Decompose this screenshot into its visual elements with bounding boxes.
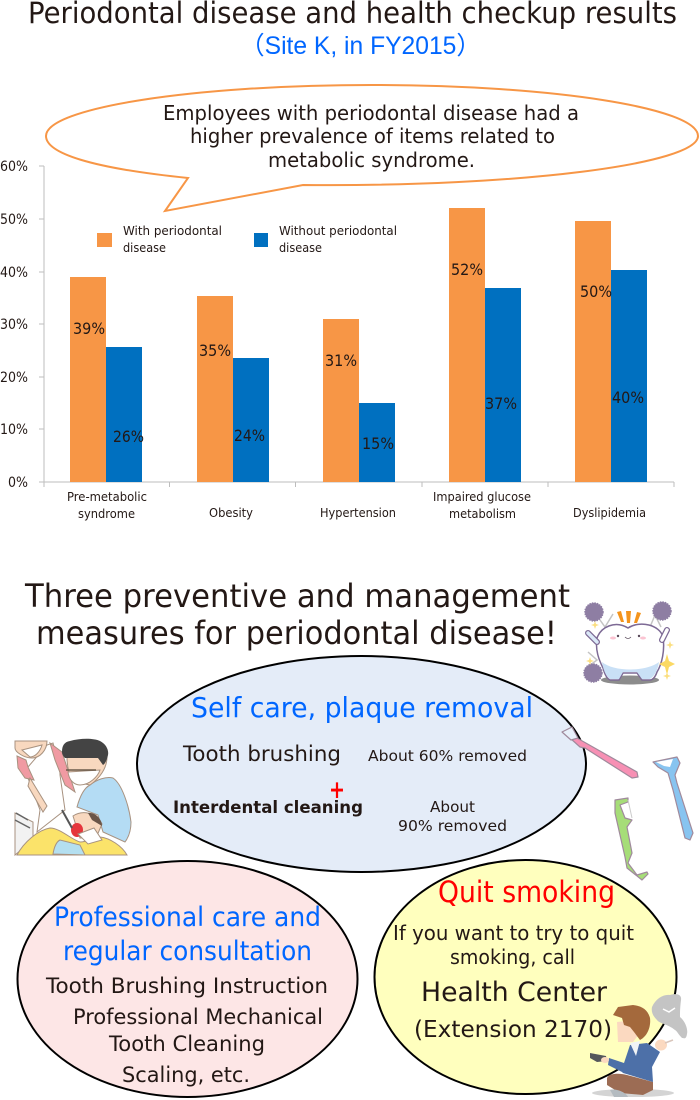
panel: self care: [137, 656, 586, 872]
icon: green floss pick: [615, 798, 648, 880]
panel: quit smoking: Health Center: [421, 977, 608, 1008]
category labels: Hypertension: [320, 505, 396, 520]
value labels: 40%: [612, 388, 644, 407]
heading: three measures: Three preventive and management: [24, 577, 570, 615]
heading: three measures: [24, 577, 570, 652]
legend: Without periodontal: [279, 223, 397, 238]
callout: [46, 85, 698, 211]
panel: self care: About 60% removed: [368, 747, 527, 765]
y axis: 30%: [0, 317, 28, 333]
legend: With periodontal: [123, 223, 222, 238]
y axis: [0, 159, 674, 491]
value labels: 31%: [325, 351, 357, 370]
panel: self care: Self care, plaque removal: [191, 691, 533, 724]
y axis: 40%: [0, 265, 28, 281]
panel: self care: About: [430, 798, 475, 816]
panel: quit smoking: [374, 860, 676, 1094]
category labels: Impaired glucose: [433, 489, 531, 504]
subtitle: （Site K, in FY2015）: [240, 32, 481, 60]
icon: dentist treating child: [15, 739, 131, 855]
panel: self care: Interdental cleaning: [173, 798, 363, 818]
y axis: 50%: [0, 212, 28, 228]
value labels: 35%: [199, 341, 231, 360]
y axis: 10%: [0, 422, 28, 438]
panel: self care: 90% removed: [398, 817, 507, 835]
panel: self care: +: [329, 775, 345, 804]
icon: smiling tooth with germs: [584, 602, 675, 684]
callout: higher prevalence of items related to: [190, 124, 555, 148]
panel: self care: Tooth brushing: [182, 742, 341, 767]
panel: professional care: [18, 861, 358, 1097]
value labels: 15%: [362, 434, 394, 453]
y axis: 20%: [0, 370, 28, 386]
panel: professional care: Professional Mechanical: [73, 1005, 323, 1029]
legend: [97, 223, 397, 255]
category labels: Obesity: [209, 505, 254, 520]
value labels: 52%: [451, 260, 483, 279]
value labels: 39%: [73, 319, 105, 338]
category labels: metabolism: [449, 506, 516, 521]
panel: quit smoking: If you want to try to quit: [393, 921, 634, 945]
bars: with periodontal disease: [70, 208, 611, 482]
bar chart: [0, 159, 674, 521]
icon: pink toothbrush: [562, 727, 638, 778]
callout: metabolic syndrome.: [268, 148, 475, 172]
category labels: syndrome: [78, 506, 135, 521]
panel: quit smoking: Quit smoking: [438, 875, 615, 909]
y axis: 60%: [0, 159, 28, 175]
value labels: 26%: [113, 427, 144, 446]
panel: professional care: Professional care and: [54, 902, 321, 933]
bars: without periodontal disease: [106, 270, 647, 482]
icon: man smoking with phone: [590, 994, 687, 1097]
value labels: 24%: [234, 426, 265, 445]
panel: professional care: Scaling, etc.: [122, 1063, 250, 1087]
y axis: 0%: [8, 475, 28, 491]
heading: three measures: measures for periodontal disease!: [36, 614, 557, 652]
value labels: [73, 260, 644, 453]
panel: quit smoking: (Extension 2170): [414, 1017, 612, 1043]
legend: disease: [123, 240, 166, 255]
panel: professional care: regular consultation: [63, 936, 312, 967]
panel: professional care: Tooth Brushing Instruction: [45, 974, 328, 998]
category labels: Pre-metabolic: [67, 489, 147, 504]
callout: Employees with periodontal disease had a: [163, 101, 579, 125]
icon: blue floss pick: [653, 757, 693, 840]
value labels: 37%: [485, 394, 517, 413]
category labels: Dyslipidemia: [573, 505, 646, 520]
panel: professional care: Tooth Cleaning: [108, 1032, 265, 1056]
panel: quit smoking: smoking, call: [450, 945, 575, 969]
category labels: [67, 489, 646, 521]
legend: disease: [279, 240, 322, 255]
value labels: 50%: [580, 282, 612, 301]
